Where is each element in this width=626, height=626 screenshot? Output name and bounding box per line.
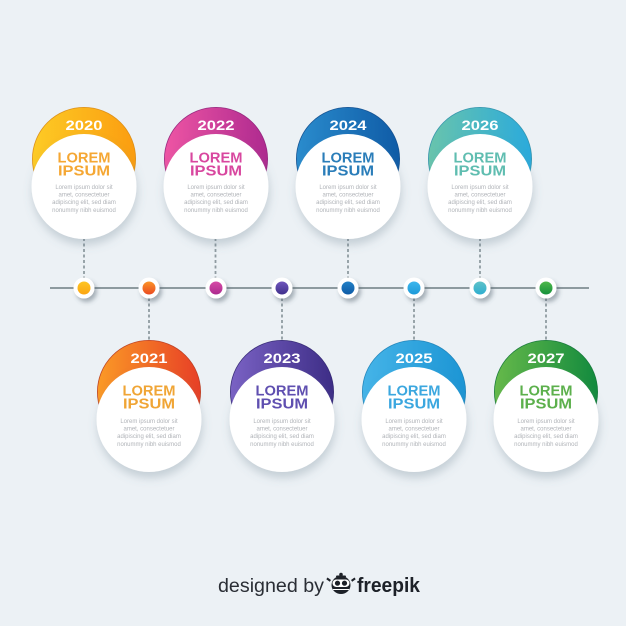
year: 2022: 2022 [198, 117, 235, 133]
connector: 2023 [281, 298, 283, 340]
body text: 2022: Lorem ipsum dolor sit [187, 185, 245, 191]
panel: 2023 [230, 340, 334, 472]
body text: 2021: Lorem ipsum dolor sit [120, 419, 178, 425]
year: 2021: 2021 [130, 350, 168, 366]
connector: 2027 [545, 298, 547, 340]
marker: 2022 [206, 278, 226, 298]
body text: 2027: Lorem ipsum dolor sit [517, 419, 575, 425]
footer credit [218, 573, 421, 597]
timeline axis [50, 287, 589, 289]
heading: 2022: IPSUM [190, 164, 242, 180]
heading: 2021: LOREM [122, 384, 176, 400]
heading: 2027: IPSUM [520, 396, 572, 412]
body text: 2024: nonummy nibh euismod [316, 208, 380, 214]
body text: 2025: amet, consectetuer [388, 427, 440, 433]
heading: 2023: LOREM [256, 384, 308, 400]
heading: 2024: IPSUM [322, 164, 374, 180]
marker: 2021 [138, 278, 160, 298]
year: 2024: 2024 [330, 117, 367, 133]
body text: 2024: amet, consectetuer [322, 193, 374, 199]
credit text: designed by [218, 576, 325, 597]
heading: 2026: IPSUM [454, 164, 506, 180]
body text: 2023: amet, consectetuer [256, 427, 308, 433]
panel: 2027 [494, 340, 598, 472]
heading: 2020: IPSUM [58, 164, 110, 180]
panel: 2026 [428, 107, 532, 239]
body text: 2027: nonummy nibh euismod [514, 442, 578, 448]
body text: 2026: nonummy nibh euismod [448, 208, 512, 214]
connector: 2024 [347, 238, 349, 278]
panel: 2020 [32, 107, 136, 239]
marker: 2026 [470, 278, 490, 298]
body text: 2025: nonummy nibh euismod [382, 442, 446, 448]
body text: 2022: amet, consectetuer [190, 193, 242, 199]
body text: 2021: amet, consectetuer [123, 427, 175, 433]
connector: 2026 [479, 238, 481, 278]
heading: 2024: LOREM [322, 150, 374, 166]
year: 2025: 2025 [396, 350, 433, 366]
marker: 2027 [536, 278, 556, 298]
marker: 2024 [338, 278, 358, 298]
body text: 2027: adipiscing elit, sed diam [514, 434, 578, 440]
body text: 2024: adipiscing elit, sed diam [316, 200, 380, 206]
heading: 2027: LOREM [520, 384, 572, 400]
body text: 2021: adipiscing elit, sed diam [117, 434, 181, 440]
icon: freepik mascot [326, 573, 356, 594]
body text: 2024: Lorem ipsum dolor sit [319, 185, 377, 191]
body text: 2026: amet, consectetuer [454, 193, 506, 199]
connector: 2021 [148, 298, 150, 340]
year: 2026: 2026 [462, 117, 499, 133]
body text: 2020: Lorem ipsum dolor sit [55, 185, 113, 191]
panel: 2022 [164, 107, 268, 239]
connector: 2020 [83, 238, 85, 278]
heading: 2023: IPSUM [256, 396, 308, 412]
body text: 2023: Lorem ipsum dolor sit [253, 419, 311, 425]
body text: 2020: adipiscing elit, sed diam [52, 200, 116, 206]
body text: 2027: amet, consectetuer [520, 427, 572, 433]
panel: 2021 [96, 340, 202, 472]
body text: 2026: Lorem ipsum dolor sit [451, 185, 509, 191]
marker: 2020 [74, 278, 94, 298]
marker: 2025 [404, 278, 424, 298]
body text: 2022: nonummy nibh euismod [184, 208, 248, 214]
body text: 2023: adipiscing elit, sed diam [250, 434, 314, 440]
body text: 2026: adipiscing elit, sed diam [448, 200, 512, 206]
panel: 2025 [362, 340, 466, 472]
year: 2027: 2027 [528, 350, 565, 366]
heading: 2020: LOREM [58, 150, 110, 166]
body text: 2020: nonummy nibh euismod [52, 208, 116, 214]
panel: 2024 [296, 107, 400, 239]
year: 2023: 2023 [264, 350, 301, 366]
body text: 2025: Lorem ipsum dolor sit [385, 419, 443, 425]
body text: 2022: adipiscing elit, sed diam [184, 200, 248, 206]
heading: 2025: IPSUM [388, 396, 440, 412]
heading: 2026: LOREM [454, 150, 506, 166]
heading: 2025: LOREM [388, 384, 440, 400]
body text: 2025: adipiscing elit, sed diam [382, 434, 446, 440]
year: 2020: 2020 [66, 117, 103, 133]
heading: 2022: LOREM [190, 150, 242, 166]
connector: 2022 [214, 238, 216, 278]
marker: 2023 [272, 278, 292, 298]
brand name: freepik [357, 575, 421, 597]
connector: 2025 [413, 298, 415, 340]
body text: 2021: nonummy nibh euismod [117, 442, 181, 448]
body text: 2023: nonummy nibh euismod [250, 442, 314, 448]
heading: 2021: IPSUM [123, 396, 175, 412]
body text: 2020: amet, consectetuer [58, 193, 110, 199]
